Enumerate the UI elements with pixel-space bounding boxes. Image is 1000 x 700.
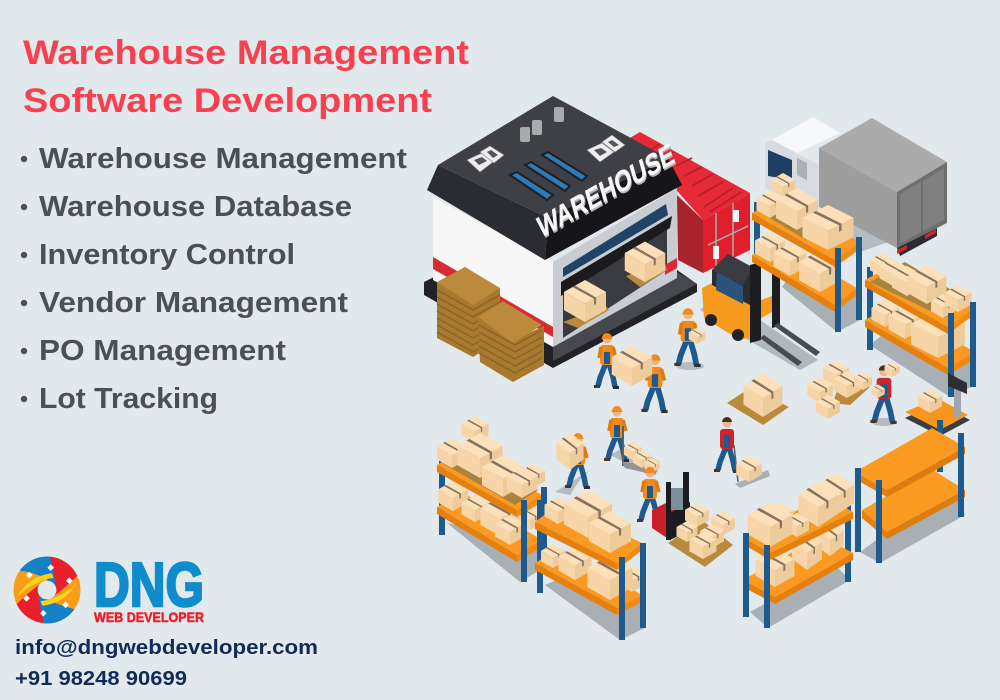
shipping container	[630, 132, 750, 273]
contact email: info@dngwebdeveloper.com	[15, 636, 318, 659]
warehouse sign: WAREHOUSE	[534, 137, 678, 245]
shelf: empty right	[855, 420, 965, 563]
feature list: Warehouse Management	[39, 143, 407, 175]
worker pair carrying box	[594, 333, 668, 413]
feature list: Vendor Management	[39, 287, 348, 319]
truck cargo box	[819, 118, 947, 256]
contact phone: +91 98248 90699	[15, 667, 187, 690]
truck	[765, 117, 947, 256]
logo wordmark DNG: DNG	[94, 551, 204, 620]
worker carrying large box	[555, 432, 590, 495]
roof top	[438, 96, 668, 218]
title: Software Development	[23, 82, 432, 120]
logo icon: swirl	[4, 547, 90, 633]
carried box	[612, 346, 652, 386]
pallet with small boxes	[807, 360, 872, 419]
pallet with box	[727, 374, 789, 425]
building plinth	[424, 270, 697, 368]
feature list: Lot Tracking	[39, 383, 218, 415]
pallet stack 2	[478, 301, 544, 382]
worker with small box	[674, 308, 705, 370]
shelf: bottom middle	[535, 490, 646, 640]
pallet stacks	[437, 267, 544, 382]
left wall	[433, 197, 553, 347]
feature list: PO Management	[39, 335, 286, 367]
logo tagline: WEB DEVELOPER	[94, 609, 204, 625]
feature list: Warehouse Database	[39, 191, 352, 223]
feature list: Inventory Control	[39, 239, 295, 271]
skylights	[510, 152, 587, 200]
truck cab	[765, 117, 840, 215]
shelf: bottom right	[743, 473, 854, 628]
roof right slope	[545, 158, 682, 260]
worker with trolley	[604, 406, 660, 475]
front wall	[553, 188, 677, 347]
warehouse building	[424, 96, 697, 368]
shelf: bottom left	[437, 416, 547, 582]
worker with red pallet truck	[637, 467, 690, 540]
pallet with boxes	[668, 503, 735, 567]
shelf: top right	[865, 253, 976, 397]
warehouse sign: WAREHOUSE	[535, 139, 679, 247]
roof left slope	[427, 165, 548, 260]
shelf: top middle	[752, 173, 862, 332]
forklift	[700, 250, 820, 370]
roof chimneys	[520, 107, 564, 142]
feature list	[21, 143, 407, 415]
worker with hand cart	[714, 417, 770, 488]
roof vents	[467, 135, 625, 172]
title	[23, 34, 469, 120]
title: Warehouse Management	[23, 34, 469, 72]
logo	[4, 547, 204, 633]
worker in red carrying boxes	[870, 362, 900, 426]
door boxes	[563, 306, 609, 328]
pallet stack 1	[437, 267, 500, 357]
weighing scale	[905, 373, 970, 436]
